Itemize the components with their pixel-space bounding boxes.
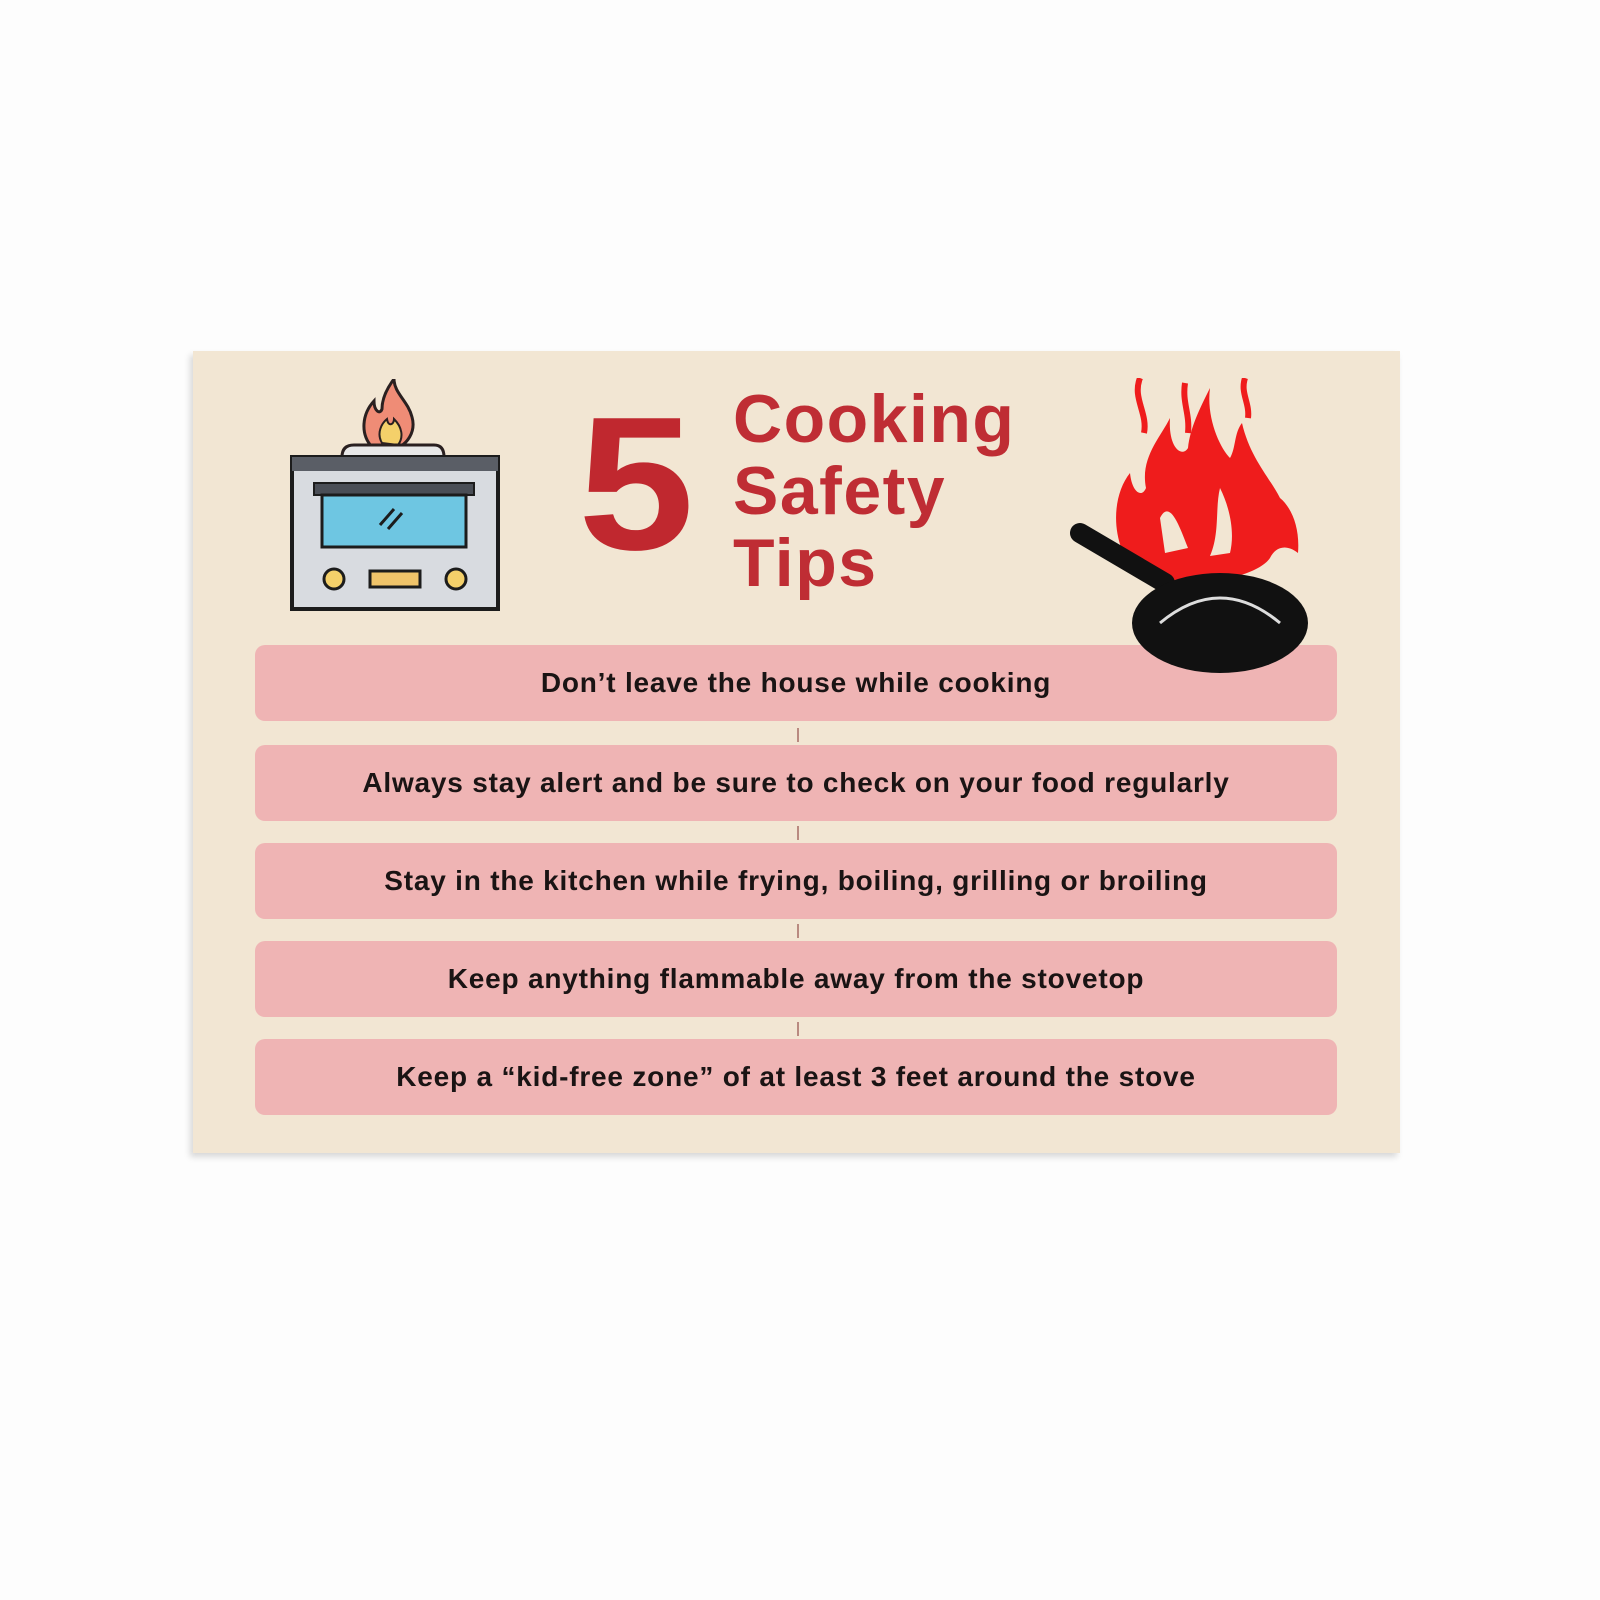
tip 3: [255, 843, 1337, 919]
title text: Cooking: [733, 381, 1015, 457]
icon: flaming frying pan: [1070, 378, 1308, 673]
icon: oven with flame: [290, 379, 500, 611]
panel: poster card: [193, 351, 1400, 1153]
tip 2: [255, 745, 1337, 821]
title text: Safety: [733, 453, 946, 529]
tip 3: Stay in the kitchen while frying, boiling, grilling or broiling: [384, 865, 1208, 896]
tip 4: [255, 941, 1337, 1017]
tip 1: [255, 645, 1337, 721]
tip 5: [255, 1039, 1337, 1115]
tip 2: Always stay alert and be sure to check on your food regularly: [362, 767, 1230, 798]
tip 4: Keep anything flammable away from the stovetop: [448, 963, 1144, 994]
tip 1: Don’t leave the house while cooking: [541, 667, 1051, 698]
title text: [733, 381, 1015, 601]
title number 5: 5: [578, 378, 694, 590]
tip 5: Keep a “kid-free zone” of at least 3 feet around the stove: [396, 1061, 1196, 1092]
title text: Tips: [733, 525, 878, 601]
